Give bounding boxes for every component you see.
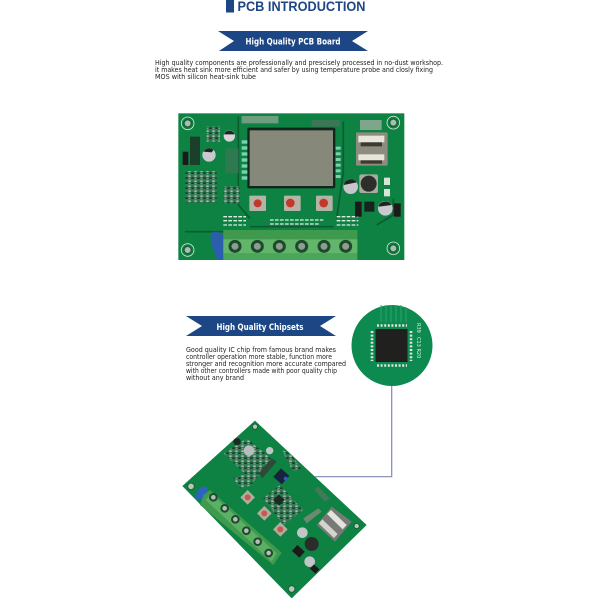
green terminal block [200, 490, 282, 565]
mounting holes [184, 119, 397, 254]
banner: High Quality Chipsets [186, 316, 336, 336]
blue capacitor [211, 232, 224, 259]
main chip [273, 468, 289, 484]
LCD screen [247, 128, 335, 188]
text block: chipset description: without any brand [186, 373, 244, 382]
chip magnifier circle: C13 R20 [415, 337, 421, 358]
text block: board description [155, 58, 443, 81]
chip magnifier circle [352, 305, 432, 386]
USB connector [317, 507, 352, 542]
mounting holes [188, 424, 359, 592]
text block: chipset description: controller operation more stable, function more [186, 352, 332, 361]
capacitors [202, 148, 216, 162]
green terminal block [223, 230, 357, 260]
dashed pads [223, 217, 358, 225]
text block: chipset description: Good quality IC chip from famous brand makes [186, 345, 336, 354]
photo: PCB board front [178, 113, 404, 260]
buttons [240, 490, 288, 537]
blue capacitor [193, 484, 210, 502]
banner: High Quality PCB Board: High Quality PCB Board [246, 38, 340, 48]
USB connector [356, 132, 388, 166]
photo: PCB board angled [182, 421, 367, 598]
buttons [249, 196, 333, 211]
callout connector line [315, 385, 392, 477]
text block: board description: it makes heat sink more efficient and safer by using temperature probe and closly fixing [155, 65, 433, 74]
inductor [359, 174, 378, 193]
LCD side pads [242, 140, 341, 180]
banner: High Quality Chipsets: High Quality Chipsets [216, 323, 304, 333]
text block: chipset description [186, 345, 346, 382]
text block: board description: High quality components are professionally and prescisely processed in no-dust workshop. [155, 58, 443, 67]
text block: board description: MOS with silicon heat-sink tube [155, 72, 257, 81]
inductor [305, 537, 319, 551]
text block: chipset description: stronger and recognition more accurate compared [186, 359, 346, 368]
small components left [185, 116, 340, 203]
chip magnifier circle: R39 [415, 323, 421, 333]
text block: chipset description: with other controllers made with poor quality chip [186, 366, 337, 375]
banner: High Quality PCB Board [218, 31, 368, 51]
capacitors [244, 445, 254, 456]
right ICs [364, 202, 374, 212]
circuitry patches [223, 438, 330, 525]
